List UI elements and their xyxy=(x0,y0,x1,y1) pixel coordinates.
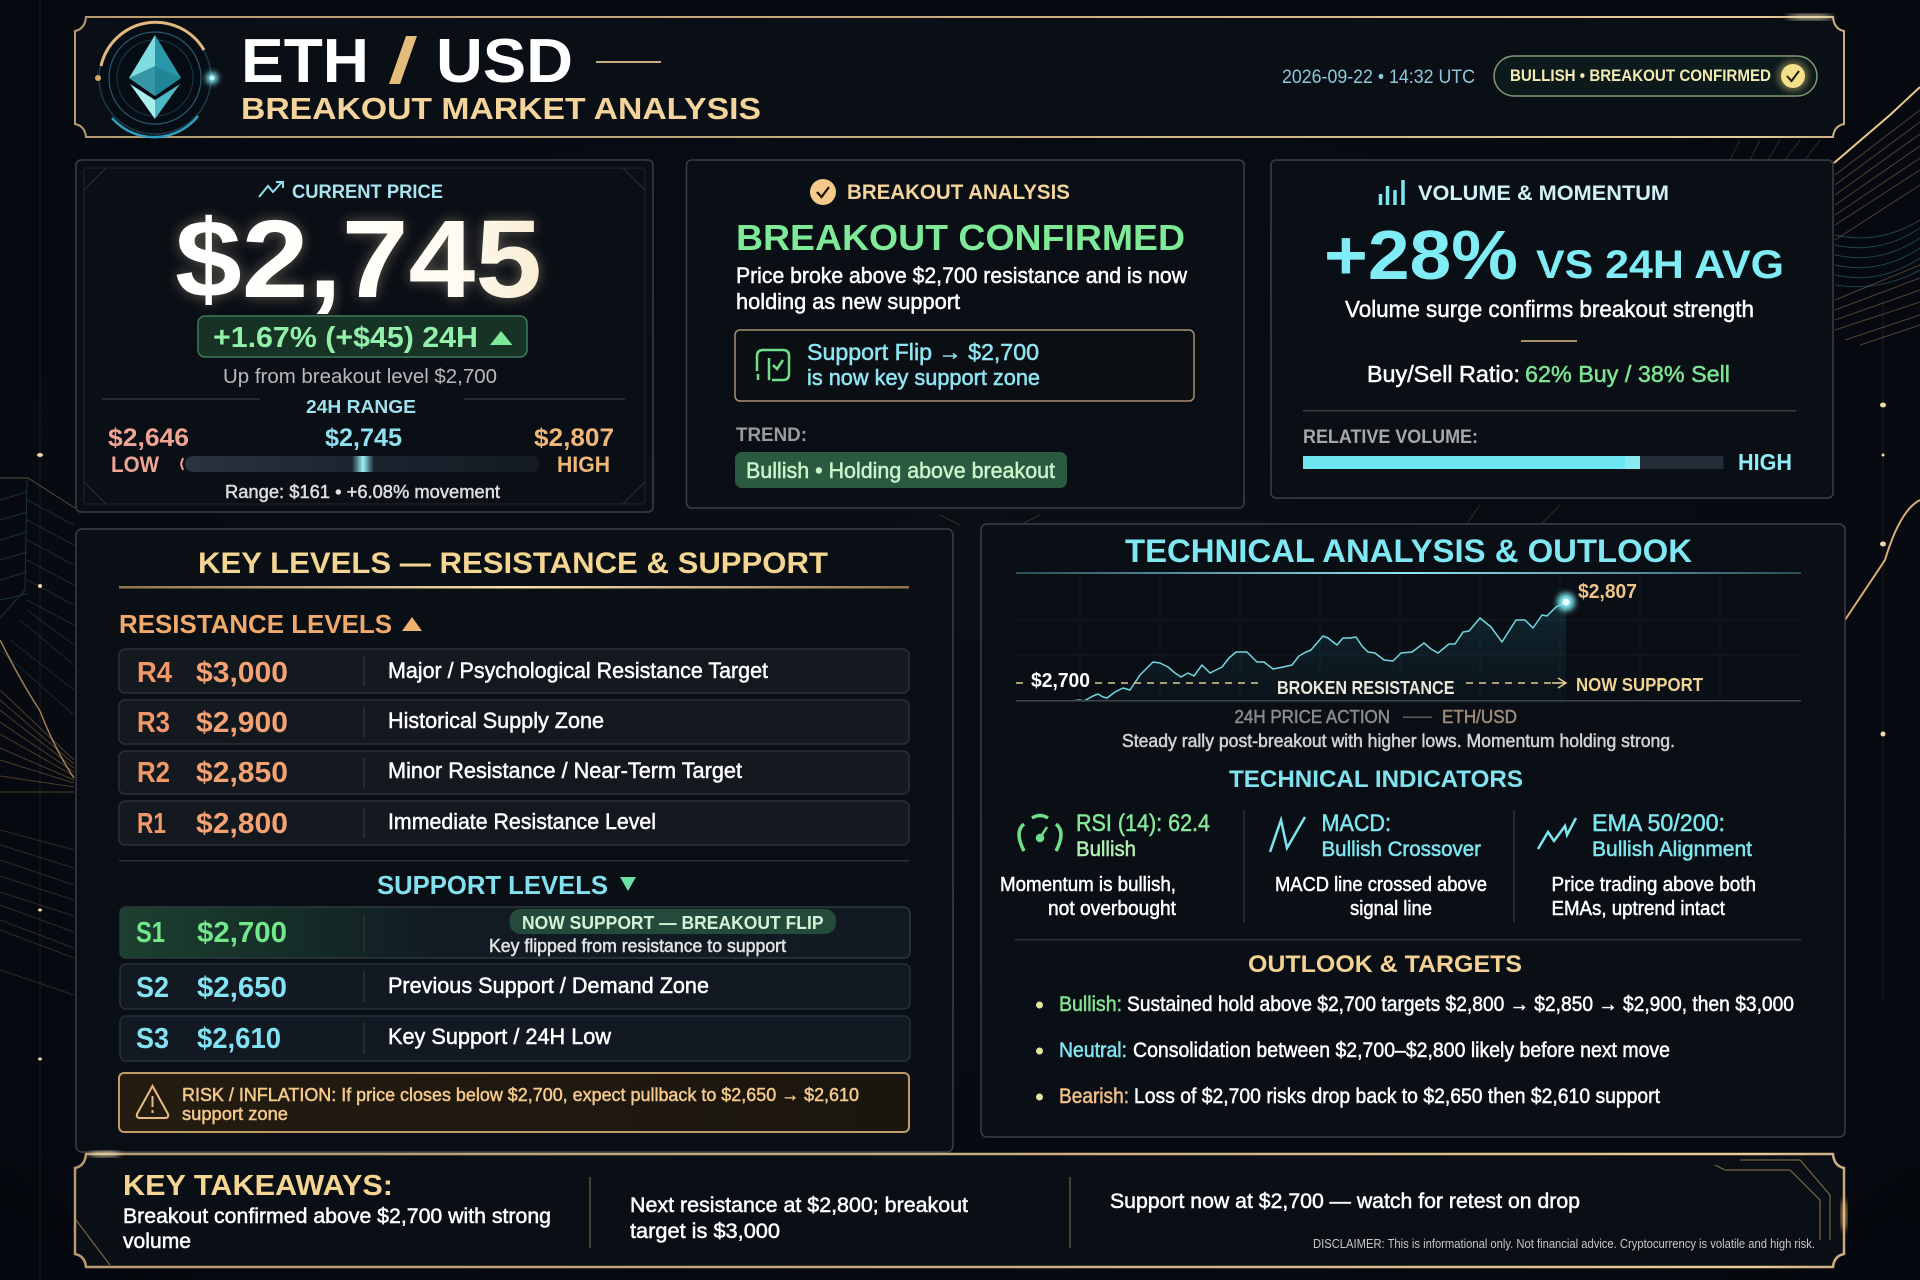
outlook: bullish: Sustained hold above $2,700 targets $2,800 → $2,850 → $2,900, then $3,000 xyxy=(1127,993,1794,1016)
row: S2: S2 xyxy=(136,972,169,1004)
title: ETH xyxy=(241,27,369,96)
headline: BREAKOUT CONFIRMED xyxy=(736,217,1185,258)
row: R4: $3,000 xyxy=(196,657,288,689)
row: S1: NOW SUPPORT — BREAKOUT FLIP xyxy=(522,913,824,933)
heading: outlook and targets: OUTLOOK & TARGETS xyxy=(1248,951,1522,978)
row: S1 xyxy=(120,907,910,958)
row: R1: R1 xyxy=(137,808,166,840)
indicator: RSI: Momentum is bullish, xyxy=(1000,874,1176,896)
panel: volume and momentum xyxy=(1271,160,1833,498)
indicator: EMA: Bullish Alignment xyxy=(1592,838,1752,861)
range values: $2,807 xyxy=(534,424,614,452)
range values: HIGH xyxy=(557,452,610,477)
breakout note: Up from breakout level $2,700 xyxy=(223,366,497,388)
range bar xyxy=(181,456,540,472)
trend pill: Bullish • Holding above breakout xyxy=(746,458,1055,483)
takeaway: breakout: Breakout confirmed above $2,700 with strong xyxy=(123,1205,551,1228)
trend pill xyxy=(735,452,1067,488)
takeaway: breakout xyxy=(123,1205,551,1253)
risk callout: support zone xyxy=(182,1103,288,1124)
row: R1 xyxy=(119,801,909,845)
panel: key levels xyxy=(76,529,953,1152)
header banner xyxy=(75,15,1844,137)
row: R2 xyxy=(119,751,909,794)
price chart xyxy=(1016,575,1801,702)
icon: MACD lines xyxy=(1270,817,1305,852)
range values: $2,745 xyxy=(325,424,402,452)
label: current price: CURRENT PRICE xyxy=(292,182,443,203)
indicator: RSI: not overbought xyxy=(1048,898,1176,920)
row: S2: $2,650 xyxy=(197,972,287,1004)
row: R4 xyxy=(119,649,909,693)
24h change pill: +1.67% (+$45) 24H xyxy=(213,322,478,354)
indicator: RSI: RSI (14): 62.4 xyxy=(1076,810,1210,837)
row: S1: $2,700 xyxy=(197,917,287,949)
heading: technical indicators: TECHNICAL INDICATORS xyxy=(1229,766,1523,793)
range summary: Range: $161 • +6.08% movement xyxy=(225,482,500,502)
title xyxy=(241,27,661,96)
row: R3: $2,900 xyxy=(196,707,288,739)
relative volume label: RELATIVE VOLUME: xyxy=(1303,427,1478,448)
breakout description: holding as new support xyxy=(736,289,960,314)
panel: technical analysis xyxy=(981,524,1845,1137)
row: R2: $2,850 xyxy=(196,757,288,789)
row: S1: S1 xyxy=(136,917,165,949)
row: R2: Minor Resistance / Near-Term Target xyxy=(388,758,742,783)
icon: trend arrow xyxy=(259,182,283,197)
chart summary: Steady rally post-breakout with higher lows. Momentum holding strong. xyxy=(1122,731,1675,751)
takeaway: breakout: volume xyxy=(123,1230,191,1253)
row: R1: $2,800 xyxy=(196,808,288,840)
panel: current price xyxy=(76,160,653,512)
chart caption: ETH/USD xyxy=(1442,707,1517,727)
price value: $2,745 xyxy=(175,198,542,321)
breakout description xyxy=(736,263,1187,314)
buy sell ratio xyxy=(1367,361,1730,387)
volume change: +28% xyxy=(1324,216,1518,294)
range values xyxy=(108,424,614,477)
range values: LOW xyxy=(111,452,159,477)
chart caption xyxy=(1234,707,1517,727)
volume note: Volume surge confirms breakout strength xyxy=(1345,296,1754,322)
row: S3: S3 xyxy=(136,1023,169,1055)
label: now support: NOW SUPPORT xyxy=(1576,675,1703,695)
risk callout xyxy=(119,1073,909,1132)
takeaway: support: Support now at $2,700 — watch for retest on drop xyxy=(1110,1190,1580,1213)
icon: check badge xyxy=(810,179,836,205)
indicator: RSI: Bullish xyxy=(1076,838,1136,861)
support flip text: Support Flip → $2,700 xyxy=(807,339,1039,365)
buy sell ratio: 62% Buy / 38% Sell xyxy=(1525,361,1730,387)
row: R2: R2 xyxy=(137,757,170,789)
heading: key levels: KEY LEVELS — RESISTANCE & SUPPORT xyxy=(198,547,828,580)
indicator: EMA: EMA 50/200: xyxy=(1592,810,1725,837)
heading: technical analysis: TECHNICAL ANALYSIS & OUTLOOK xyxy=(1125,533,1692,569)
row: S3 xyxy=(120,1016,910,1061)
status pill xyxy=(1494,56,1817,96)
outlook: neutral: Neutral: xyxy=(1059,1039,1127,1062)
risk text: RISK / INFLATION: If price closes below $2,700, expect pullback to $2,650 → $2,610 xyxy=(182,1084,859,1105)
high label: HIGH xyxy=(1738,449,1792,475)
volume change: VS 24H AVG xyxy=(1536,243,1784,287)
24h change pill xyxy=(198,316,527,357)
row: R1: Immediate Resistance Level xyxy=(388,809,656,834)
row: R3: Historical Supply Zone xyxy=(388,708,604,733)
row: S3: $2,610 xyxy=(197,1023,281,1055)
chart caption: 24H PRICE ACTION xyxy=(1234,707,1390,727)
dashed support line xyxy=(1016,678,1566,688)
buy sell ratio: Buy/Sell Ratio: xyxy=(1367,361,1520,387)
indicator: RSI xyxy=(1000,810,1210,920)
title: USD xyxy=(436,27,573,96)
status pill: BULLISH • BREAKOUT CONFIRMED xyxy=(1510,66,1771,85)
icon: warning xyxy=(137,1086,168,1118)
indicator: MACD xyxy=(1270,810,1487,920)
indicator: EMA: Price trading above both xyxy=(1552,874,1756,896)
label: volume and momentum: VOLUME & MOMENTUM xyxy=(1418,182,1669,205)
heading: resistance levels: RESISTANCE LEVELS xyxy=(119,609,392,639)
row: S2: Previous Support / Demand Zone xyxy=(388,973,709,998)
trend label: TREND: xyxy=(736,425,807,446)
label: breakout analysis: BREAKOUT ANALYSIS xyxy=(847,181,1070,204)
row: R4: R4 xyxy=(137,657,172,689)
badge: now support xyxy=(510,909,836,934)
date: 2026-09-22 • 14:32 UTC xyxy=(1282,67,1475,88)
panel: breakout analysis xyxy=(686,160,1244,508)
takeaway: next resistance: target is $3,000 xyxy=(630,1220,780,1243)
breakout description: Price broke above $2,700 resistance and is now xyxy=(736,263,1187,288)
outlook: bullish: Bullish: xyxy=(1059,993,1122,1016)
icon: EMA trend xyxy=(1538,818,1576,849)
indicator: MACD: signal line xyxy=(1350,898,1432,920)
label: peak price: $2,807 xyxy=(1578,581,1637,603)
icon: Ethereum coin xyxy=(95,22,218,137)
indicator: MACD: MACD: xyxy=(1322,810,1391,837)
row: R3 xyxy=(119,700,909,744)
heading: support levels: SUPPORT LEVELS xyxy=(377,870,608,900)
icon: gauge xyxy=(1019,816,1061,851)
indicator: MACD: Bullish Crossover xyxy=(1322,838,1481,861)
row: S3: Key Support / 24H Low xyxy=(388,1024,611,1049)
header frame xyxy=(75,17,1844,137)
disclaimer: DISCLAIMER: This is informational only. Not financial advice. Cryptocurrency is volatile and high risk. xyxy=(1313,1236,1815,1251)
outlook: bearish: Bearish: xyxy=(1059,1085,1129,1108)
label: broken resistance: BROKEN RESISTANCE xyxy=(1277,677,1454,698)
heading: key takeaways: KEY TAKEAWAYS: xyxy=(123,1170,393,1202)
label: support level: $2,700 xyxy=(1031,670,1090,692)
outlook: neutral: Consolidation between $2,700–$2,800 likely before next move xyxy=(1133,1039,1670,1062)
subtitle: BREAKOUT MARKET ANALYSIS xyxy=(241,91,761,126)
relative volume bar xyxy=(1303,456,1724,469)
takeaway: next resistance xyxy=(630,1194,968,1243)
glowing price marker xyxy=(1557,593,1575,611)
outlook: bearish: Loss of $2,700 risks drop back to $2,650 then $2,610 support xyxy=(1134,1085,1660,1108)
indicator: MACD: MACD line crossed above xyxy=(1275,874,1487,896)
row: R3: R3 xyxy=(137,707,170,739)
panel: key takeaways xyxy=(75,1152,1846,1267)
24h range label: 24H RANGE xyxy=(306,397,416,417)
volume change xyxy=(1324,216,1784,294)
support flip callout: is now key support zone xyxy=(807,365,1040,390)
flip note: Key flipped from resistance to support xyxy=(489,936,786,956)
row: S2 xyxy=(120,964,910,1009)
icon: support flip xyxy=(757,350,789,380)
support flip callout xyxy=(735,330,1194,401)
icon: volume bars xyxy=(1380,180,1403,205)
takeaway: next resistance: Next resistance at $2,800; breakout xyxy=(630,1194,968,1217)
indicator: EMA xyxy=(1538,810,1756,920)
indicator: EMA: EMAs, uptrend intact xyxy=(1552,898,1725,920)
range values: $2,646 xyxy=(108,424,189,452)
row: R4: Major / Psychological Resistance Target xyxy=(388,658,768,683)
